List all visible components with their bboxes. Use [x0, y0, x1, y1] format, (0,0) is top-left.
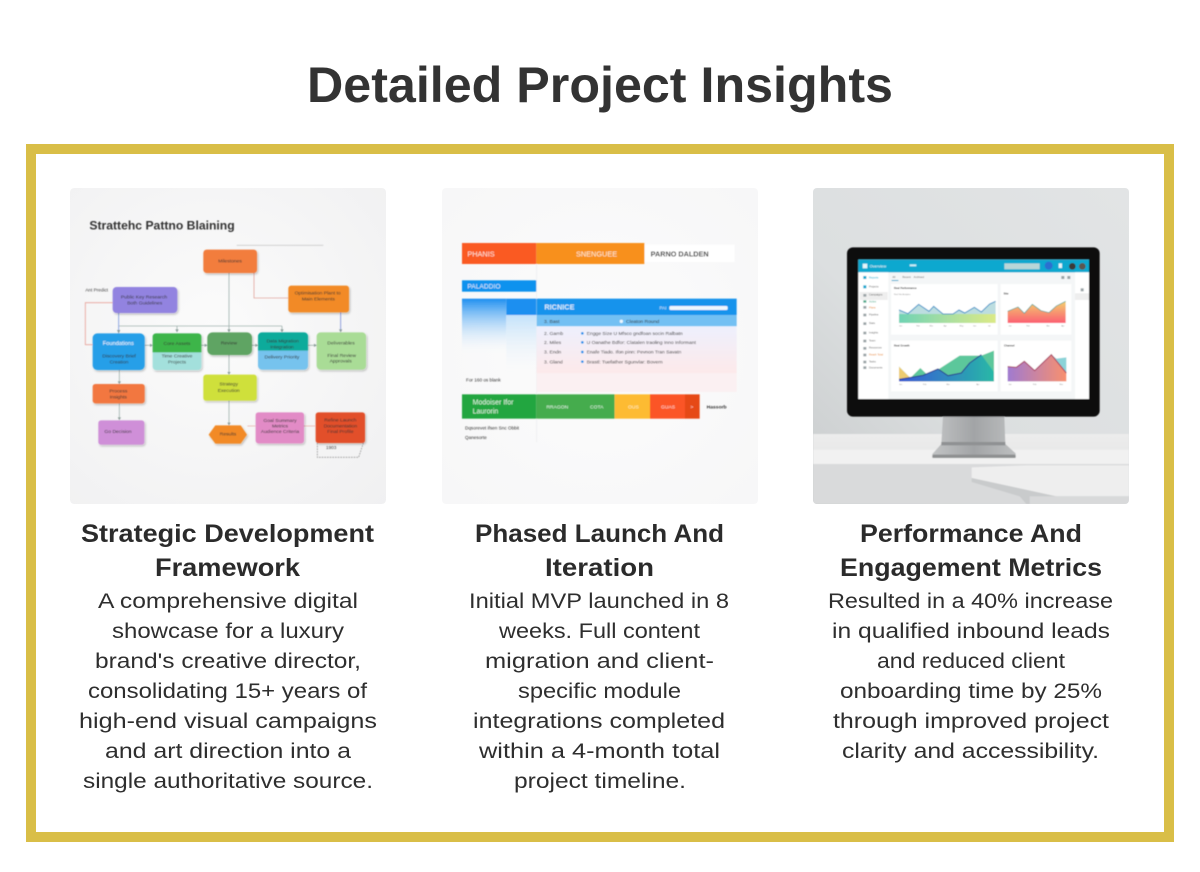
monitor: Reach Total — [869, 352, 883, 356]
monitor: Recent — [902, 275, 911, 279]
image: phased launch timeline chart: PARNO DALDEN — [651, 249, 709, 258]
image: strategic planning flowchart: Creation — [110, 359, 129, 365]
body text: brand's creative director, — [95, 649, 361, 673]
body text: Resulted in a 40% increase — [828, 589, 1113, 613]
image: phased launch timeline chart: Brastl: Tuefather Sgunvlar: Bovern — [587, 359, 663, 365]
image: strategic planning flowchart: Approvals — [330, 359, 352, 365]
heading: Phased Launch And — [475, 520, 724, 548]
body text: onboarding time by 25% — [840, 679, 1102, 703]
body text: clarity and accessibility. — [842, 739, 1099, 763]
monitor: Pipeline — [869, 312, 879, 316]
image: phased launch timeline chart: For 160 os blank — [466, 377, 501, 382]
image: strategic planning flowchart: Ant Predict — [85, 288, 109, 293]
monitor: Stats — [869, 321, 876, 325]
image: strategic planning flowchart: Audience Criteria — [261, 429, 299, 435]
monitor: Feb — [916, 325, 921, 327]
monitor: Apr — [944, 324, 947, 327]
body text — [79, 589, 377, 793]
heading: Performance And — [860, 520, 1082, 548]
image: strategic planning flowchart: Final Profile — [327, 429, 354, 435]
image: phased launch timeline chart: RICNICE — [544, 303, 575, 312]
image: phased launch timeline chart: 3. Endn — [544, 350, 561, 356]
monitor: Team — [869, 338, 876, 342]
image: strategic planning flowchart: Projects — [168, 359, 187, 365]
image: phased launch timeline chart: > — [690, 405, 693, 411]
image: phased launch timeline chart: Hassorb — [707, 405, 727, 411]
image: phased launch timeline chart: Engge Size U Mfsco gndfoan socin Ralbatn — [587, 331, 683, 337]
heading — [840, 520, 1102, 582]
body text: A comprehensive digital — [98, 589, 358, 613]
monitor stand — [932, 416, 1016, 458]
monitor: Campaigns — [869, 293, 883, 297]
image: strategic planning flowchart: Foundations — [103, 341, 134, 347]
monitor: Insights — [869, 330, 879, 334]
image: strategic planning flowchart: Both Guidelines — [127, 300, 163, 306]
monitor: Jan — [899, 384, 902, 386]
monitor: Apr — [1061, 324, 1065, 327]
monitor: Tasks — [869, 359, 876, 363]
image: strategic planning flowchart: Goal Summary — [263, 418, 297, 424]
image: strategic planning flowchart: Data Migration — [266, 338, 299, 344]
monitor — [847, 247, 1100, 417]
image: strategic planning flowchart: Strategy — [219, 381, 238, 387]
monitor: Real Growth — [894, 343, 910, 347]
image: strategic planning flowchart: Refine Launch — [324, 417, 357, 423]
monitor: Documents — [869, 365, 883, 369]
image: phased launch timeline chart: GUAS — [661, 405, 676, 411]
image: strategic planning flowchart: Insights — [110, 394, 127, 400]
body text: Initial MVP launched in 8 — [469, 589, 729, 613]
monitor: Jan — [1008, 325, 1012, 327]
image: dashboard on desktop monitor — [813, 188, 1129, 504]
body text: through improved project — [833, 709, 1109, 733]
body text: integrations completed — [473, 709, 725, 733]
body text: showcase for a luxury — [112, 619, 344, 643]
image: phased launch timeline chart: Dqsorevet ifsen Snc Obbit — [465, 425, 520, 430]
monitor: Jun — [973, 325, 976, 327]
monitor: Jul — [988, 325, 991, 327]
image: strategic planning flowchart: Execution — [218, 388, 240, 394]
heading: Iteration — [545, 554, 654, 582]
heading: Framework — [155, 554, 300, 582]
image: strategic planning flowchart: Time Creative — [162, 354, 193, 360]
image: strategic planning flowchart: Optimisation Plant to — [295, 291, 341, 297]
monitor: Jan — [899, 325, 902, 327]
heading: Engagement Metrics — [840, 554, 1102, 582]
body text: and art direction into a — [105, 739, 351, 763]
body text: and reduced client — [877, 649, 1065, 673]
monitor: Mar — [1060, 383, 1063, 386]
image: strategic planning flowchart: Metrics — [272, 423, 289, 429]
heading — [475, 520, 724, 582]
body text: specific module — [518, 679, 681, 703]
monitor: Channel — [1004, 343, 1015, 347]
desk — [813, 434, 1129, 504]
image: strategic planning flowchart: Public Key Research — [121, 294, 167, 300]
monitor: Apr — [976, 383, 980, 386]
image: strategic planning flowchart: Integration — [270, 345, 294, 351]
image: strategic planning flowchart: Core Assets — [164, 341, 191, 347]
monitor: Mar — [1046, 324, 1050, 327]
image: phased launch timeline chart: 2. Gamb — [544, 331, 563, 337]
monitor: Mar — [930, 324, 933, 327]
column: performance and engagement metrics — [828, 520, 1113, 763]
image: strategic planning flowchart: Go Decision — [104, 429, 132, 435]
body text: weeks. Full content — [498, 619, 700, 643]
monitor: Real Performance — [894, 286, 917, 290]
image: strategic planning flowchart: Deliverables — [327, 341, 355, 347]
image: strategic planning flowchart: 1903 — [326, 445, 337, 450]
image: strategic planning flowchart: Main Elements — [302, 297, 335, 303]
monitor: Overview — [870, 264, 886, 269]
heading — [81, 520, 375, 582]
image: phased launch timeline chart: Modoiser Ifor — [473, 400, 514, 407]
image: phased launch timeline chart: OUS — [628, 405, 639, 411]
monitor: Reports — [869, 275, 879, 279]
monitor: Archived — [914, 275, 925, 279]
image: phased launch timeline chart: Laurorin — [473, 409, 498, 416]
monitor: Active — [869, 299, 877, 303]
monitor: Site — [1004, 291, 1009, 295]
image: phased launch timeline chart: PHANIS — [467, 249, 495, 258]
monitor: Projects — [869, 284, 879, 288]
image: strategic planning flowchart: Strattehc Pattno Blaining — [89, 219, 235, 232]
image: phased launch timeline chart: Qanesorte — [465, 435, 487, 440]
body text: within a 4-month total — [478, 739, 720, 763]
monitor: Mar — [946, 383, 950, 386]
body text: consolidating 15+ years of — [88, 679, 367, 703]
monitor: May — [960, 325, 963, 327]
image: phased launch timeline chart — [442, 188, 758, 504]
image: phased launch timeline chart: PALADDIO — [467, 283, 501, 290]
title: Detailed Project Insights — [307, 57, 893, 113]
body text: high-end visual campaigns — [79, 709, 377, 733]
monitor: Plans — [869, 305, 876, 309]
monitor: Feb — [923, 384, 927, 386]
body text — [828, 589, 1113, 763]
image: phased launch timeline chart: 3. Bast — [544, 319, 560, 325]
image: phased launch timeline chart: Enafe Tiado. Ifon pinn: Pevnon Tran Savatn — [587, 350, 682, 356]
monitor: Real Site Analytics — [894, 293, 910, 296]
body text: single authoritative source. — [83, 769, 373, 793]
image: phased launch timeline chart: RRAGON — [546, 405, 569, 411]
image: strategic planning flowchart: Discovery Brief — [102, 354, 136, 360]
image: strategic planning flowchart: Milestones — [218, 258, 242, 264]
image: strategic planning flowchart: Review — [221, 341, 238, 347]
body text: project timeline. — [514, 769, 686, 793]
image: strategic planning flowchart: Final Review — [327, 353, 356, 359]
body text: migration and client- — [485, 649, 714, 673]
image: strategic planning flowchart: Delivery Priority — [265, 354, 300, 360]
image: phased launch timeline chart: PAI — [659, 306, 667, 311]
image: phased launch timeline chart: Cleaton Round — [626, 319, 659, 325]
body text — [469, 589, 729, 793]
monitor: Feb — [1026, 325, 1031, 327]
image: phased launch timeline chart: 2. Miles — [544, 340, 562, 346]
column: strategic development framework — [79, 520, 377, 793]
image: phased launch timeline chart: SNENGUEE — [576, 249, 617, 258]
image: phased launch timeline chart: 3. Gland — [544, 359, 563, 365]
gold frame panel — [31, 149, 1169, 837]
image: strategic planning flowchart: Documentation — [324, 423, 357, 429]
image: strategic planning flowchart: Results — [220, 432, 237, 438]
monitor: Resources — [869, 346, 882, 350]
image: strategic planning flowchart: Process — [109, 389, 128, 395]
image: phased launch timeline chart: U Oanathe Bdfor: Clatalen traoling Inno Informant — [587, 340, 697, 346]
column: phased launch and iteration — [469, 520, 729, 793]
body text: in qualified inbound leads — [832, 619, 1110, 643]
monitor: Feb — [1033, 384, 1037, 386]
monitor: Jan — [1008, 384, 1012, 386]
monitor: All — [892, 275, 896, 279]
image: phased launch timeline chart: COTA — [590, 405, 604, 411]
heading: Strategic Development — [81, 520, 375, 548]
image: strategic planning flowchart — [70, 188, 386, 504]
